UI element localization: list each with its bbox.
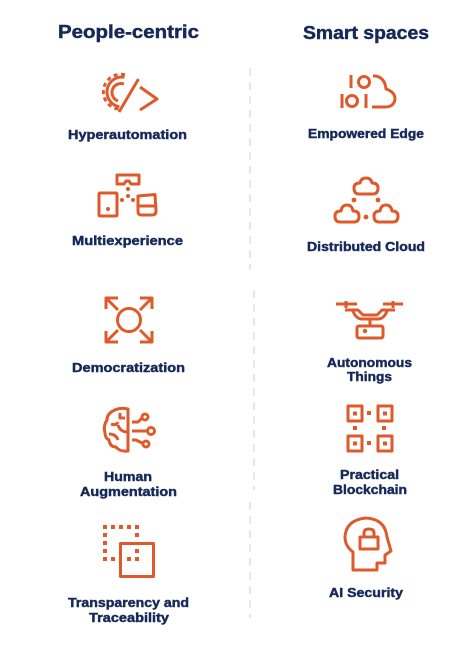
label: AI Security: AI Security xyxy=(329,585,404,600)
text: Blockchain xyxy=(333,482,407,497)
icon: Practical Blockchain QR squares xyxy=(348,406,392,451)
text: Traceability xyxy=(89,610,170,625)
label: Empowered Edge: Empowered Edge xyxy=(308,126,424,141)
icon: Multiexperience devices xyxy=(99,175,156,216)
label: Practical Blockchain: Practical xyxy=(340,467,399,482)
label: Democratization: Democratization xyxy=(72,360,185,375)
icon: AI Security head with lock xyxy=(345,518,391,570)
icon: Distributed Cloud three clouds xyxy=(335,178,398,222)
text: Augmentation xyxy=(80,484,177,499)
label: Autonomous Things: Autonomous xyxy=(327,355,412,370)
icon: Autonomous Things drone xyxy=(336,301,403,338)
label: Transparency and Traceability: Transparency and xyxy=(68,595,189,610)
icon: Empowered Edge binary cloud xyxy=(342,75,395,108)
icon: Human Augmentation brain xyxy=(104,408,154,451)
icon: Democratization circle with arrows xyxy=(106,298,152,342)
icon: Transparency dotted and solid squares xyxy=(103,525,154,576)
heading: People-centric: People-centric xyxy=(58,21,199,42)
label: Hyperautomation: Hyperautomation xyxy=(68,127,187,142)
label: Human Augmentation: Human xyxy=(104,469,152,484)
text: Things xyxy=(347,369,392,384)
label: Multiexperience: Multiexperience xyxy=(72,233,183,248)
heading: Smart spaces: Smart spaces xyxy=(303,23,429,43)
label: Distributed Cloud: Distributed Cloud xyxy=(307,239,425,254)
icon: Hyperautomation gear and code xyxy=(103,74,157,112)
